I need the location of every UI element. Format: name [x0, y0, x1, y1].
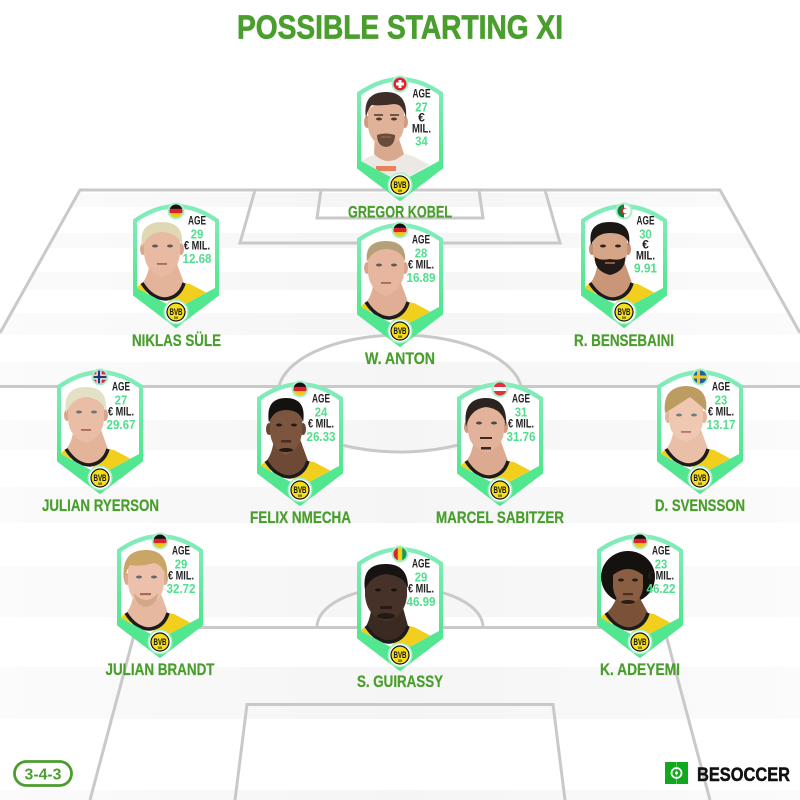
stats: 34 — [415, 134, 428, 148]
player card: Marcel Sabitzer — [458, 380, 542, 505]
flag: Algeria — [616, 202, 632, 220]
club badge — [288, 478, 312, 502]
stats: 13.17 — [706, 417, 736, 432]
club badge: 09 — [174, 316, 178, 320]
name: K. Adeyemi: K. ADEYEMI — [600, 660, 680, 679]
club badge — [612, 300, 636, 324]
stats: 29.67 — [106, 417, 136, 432]
stats: AGE — [172, 544, 190, 558]
stats — [106, 380, 136, 432]
player card: S. Guirassy — [358, 546, 442, 670]
player photo — [137, 222, 207, 307]
stats: € MIL. — [708, 404, 734, 418]
club badge: 09 — [398, 335, 402, 339]
name: R. Bensebaini: R. BENSEBAINI — [574, 331, 674, 350]
player photo — [360, 92, 430, 176]
club badge: 09 — [158, 646, 162, 650]
stats — [406, 232, 436, 285]
club badge: 09 — [698, 482, 702, 486]
club badge — [164, 300, 188, 324]
stats: 16.89 — [406, 270, 436, 285]
player photo — [361, 241, 431, 326]
stats: € MIL. — [648, 568, 674, 582]
stats: MIL. — [412, 122, 431, 136]
flag: Norway — [92, 368, 108, 386]
club badge — [388, 318, 412, 344]
club badge — [488, 478, 512, 502]
club badge: BVB — [494, 485, 507, 495]
stats — [634, 214, 657, 276]
name: Julian Brandt: JULIAN BRANDT — [106, 660, 215, 679]
club badge — [388, 172, 412, 198]
name: S. Guirassy: S. GUIRASSY — [357, 672, 444, 691]
name: Gregor Kobel: GREGOR KOBEL — [348, 202, 452, 222]
title: POSSIBLE STARTING XI — [237, 8, 563, 46]
stats — [306, 392, 336, 444]
flag: Germany — [632, 532, 648, 550]
player photo — [261, 398, 331, 485]
club badge: BVB — [170, 307, 183, 317]
stats: 29 — [415, 570, 427, 584]
stats: 31.76 — [506, 429, 536, 444]
club badge: BVB — [394, 650, 407, 660]
stats: AGE — [112, 380, 130, 394]
player photo — [61, 387, 131, 473]
stats: € MIL. — [108, 404, 134, 418]
stats: € — [642, 238, 649, 252]
club badge: BVB — [154, 637, 167, 647]
stats: MIL. — [636, 248, 655, 262]
pitch background — [0, 190, 800, 800]
club badge: 09 — [638, 646, 642, 650]
club badge: 09 — [398, 659, 402, 663]
player card: Julian Brandt — [118, 532, 202, 657]
logo: BeSoccer — [665, 762, 790, 786]
stats: € MIL. — [168, 568, 194, 582]
club badge: 09 — [98, 482, 102, 486]
name: D. Svensson: D. SVENSSON — [655, 496, 745, 515]
flag: Sweden — [692, 368, 708, 386]
name: Julian Ryerson: JULIAN RYERSON — [42, 496, 159, 515]
club badge — [88, 466, 112, 490]
player card: Julian Ryerson — [58, 368, 142, 493]
club badge: 09 — [498, 494, 502, 498]
stats: 32.72 — [166, 581, 196, 596]
club badge: 09 — [622, 316, 626, 320]
club badge: BVB — [634, 637, 647, 647]
flag: Germany — [168, 202, 184, 220]
player card: W. Anton — [358, 222, 442, 346]
stats: € MIL. — [184, 238, 210, 252]
player card: Gregor Kobel — [358, 76, 442, 200]
stats: 23 — [655, 556, 667, 572]
club badge — [388, 642, 412, 668]
stats: € MIL. — [308, 416, 334, 430]
stats: € MIL. — [408, 582, 434, 596]
club badge: BVB — [394, 326, 407, 336]
name: W. Anton: W. ANTON — [365, 349, 435, 368]
club badge: 09 — [398, 189, 402, 193]
stats: AGE — [512, 392, 530, 406]
stats — [706, 380, 736, 432]
stats: 27 — [115, 392, 127, 408]
stats: 27 — [415, 100, 428, 114]
name: Niklas Süle: NIKLAS SÜLE — [132, 331, 221, 350]
stats: 46.22 — [646, 581, 676, 596]
stats: 28 — [415, 246, 427, 260]
formation pill — [14, 762, 72, 786]
stats: 46.99 — [406, 594, 436, 609]
stats — [166, 544, 196, 596]
player photo — [121, 550, 191, 637]
stats — [646, 544, 676, 596]
club badge: BVB — [694, 473, 707, 483]
player card: R. Bensebaini — [582, 202, 666, 327]
stats: € — [418, 110, 425, 124]
stats — [406, 556, 436, 609]
club badge: BVB — [394, 180, 407, 190]
club badge — [148, 630, 172, 654]
stats: 29 — [175, 556, 187, 572]
stats: AGE — [188, 214, 206, 228]
club badge: BVB — [618, 307, 631, 317]
stats: AGE — [636, 214, 654, 228]
flag: Germany — [292, 380, 308, 398]
club badge: BVB — [94, 473, 107, 483]
player photo — [585, 222, 655, 307]
stats: 24 — [315, 404, 328, 420]
name: Felix Nmecha: FELIX NMECHA — [250, 508, 351, 527]
club badge — [688, 466, 712, 490]
stats: 9.91 — [634, 260, 657, 276]
stats — [506, 392, 536, 444]
flag: Germany — [152, 532, 168, 550]
stats: 31 — [515, 404, 527, 420]
stats: 29 — [191, 226, 203, 242]
stats — [412, 86, 431, 148]
stats: € MIL. — [408, 258, 434, 272]
player card: D. Svensson — [658, 368, 742, 493]
flag: Switzerland — [392, 76, 408, 92]
club badge: BVB — [294, 485, 307, 495]
name: Marcel Sabitzer: MARCEL SABITZER — [436, 508, 564, 527]
flag: Guinea — [392, 546, 408, 562]
club badge: 09 — [298, 494, 302, 498]
player card: Niklas Süle — [134, 202, 218, 327]
player card: K. Adeyemi — [598, 532, 682, 657]
player photo — [361, 564, 431, 650]
flag: Germany — [392, 222, 408, 238]
stats: 12.68 — [182, 251, 212, 266]
club badge — [628, 630, 652, 654]
stats: 26.33 — [306, 429, 336, 444]
stats: AGE — [412, 86, 430, 100]
player photo — [601, 551, 671, 637]
player photo — [661, 386, 731, 473]
player photo — [461, 398, 531, 485]
stats: AGE — [312, 392, 330, 406]
stats: AGE — [652, 544, 670, 558]
stats: AGE — [412, 556, 430, 570]
stats: AGE — [412, 232, 430, 246]
formation pill: 3-4-3 — [24, 766, 62, 784]
stats: AGE — [712, 380, 730, 394]
stats: € MIL. — [508, 416, 534, 430]
stats — [182, 214, 212, 266]
stats: 23 — [715, 392, 727, 408]
player card: Felix Nmecha — [258, 380, 342, 505]
flag: Austria — [492, 380, 508, 398]
stats: 30 — [639, 226, 652, 242]
